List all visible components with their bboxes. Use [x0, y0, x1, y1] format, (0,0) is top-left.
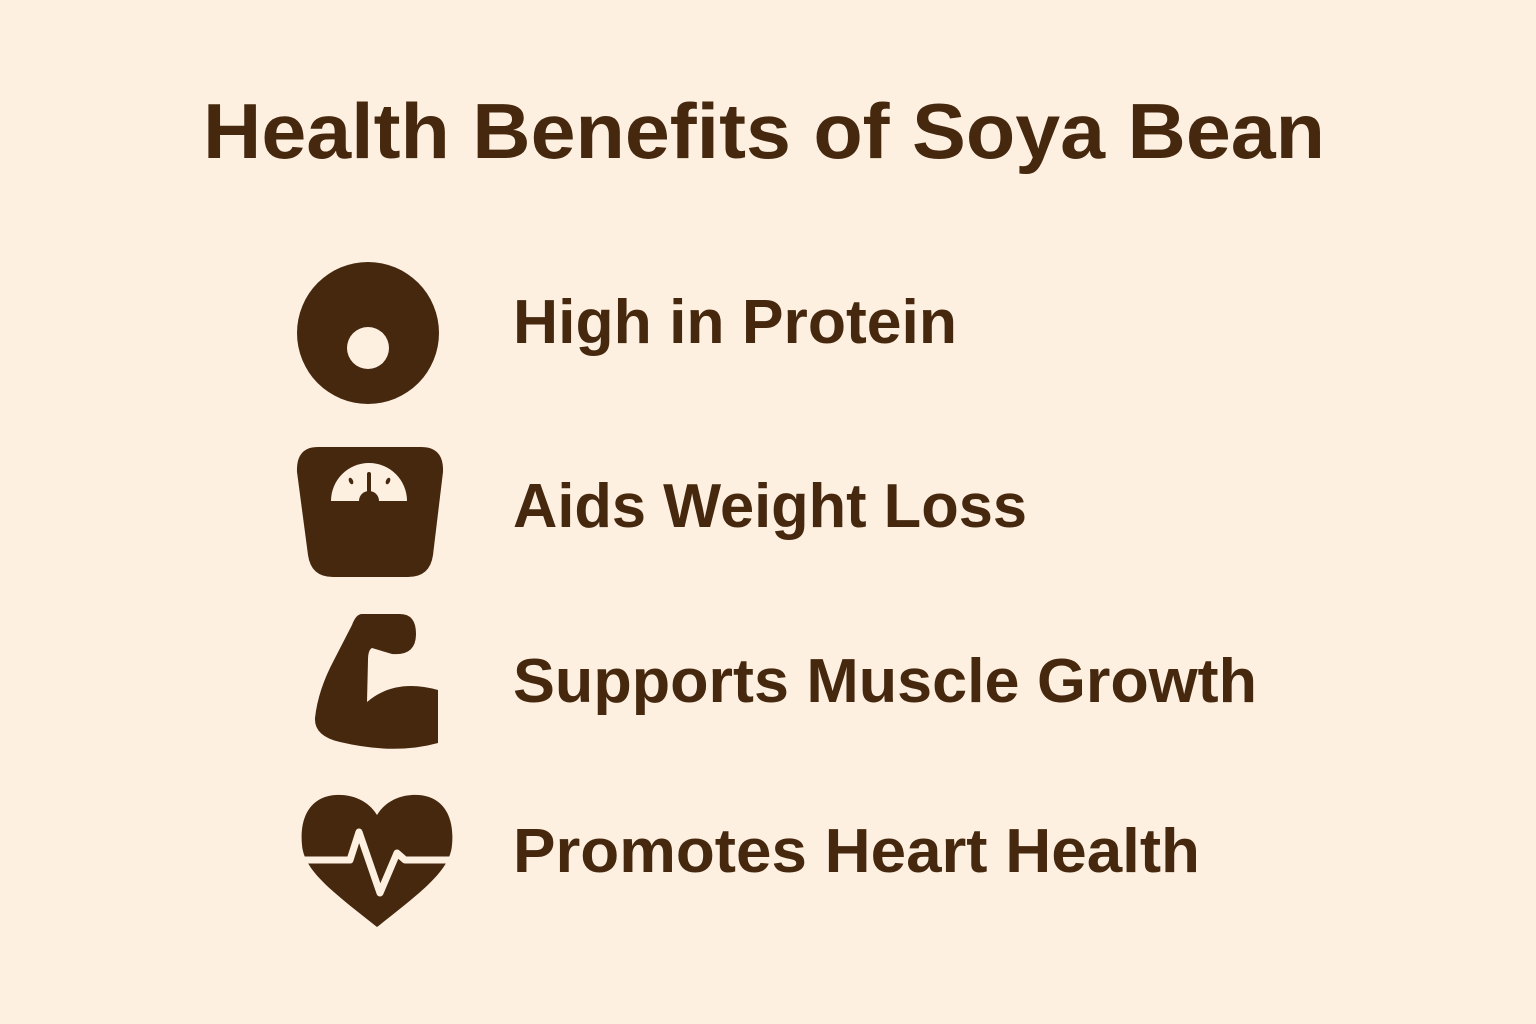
label: high in protein: High in Protein — [513, 288, 957, 357]
icon: flexed arm — [315, 614, 438, 749]
item: supports muscle growth — [315, 614, 1257, 749]
icon: heart with pulse — [300, 795, 454, 927]
icon: weighing scale — [297, 447, 443, 577]
title: Health Benefits of Soya Bean — [203, 87, 1325, 175]
label: aids weight loss: Aids Weight Loss — [513, 472, 1027, 541]
icon: protein disc — [297, 262, 439, 404]
item: promotes heart health — [300, 795, 1200, 927]
item: high in protein — [297, 262, 957, 404]
label: promotes heart health: Promotes Heart Health — [513, 817, 1200, 886]
label: supports muscle growth: Supports Muscle Growth — [513, 647, 1257, 716]
item: aids weight loss — [297, 447, 1027, 577]
